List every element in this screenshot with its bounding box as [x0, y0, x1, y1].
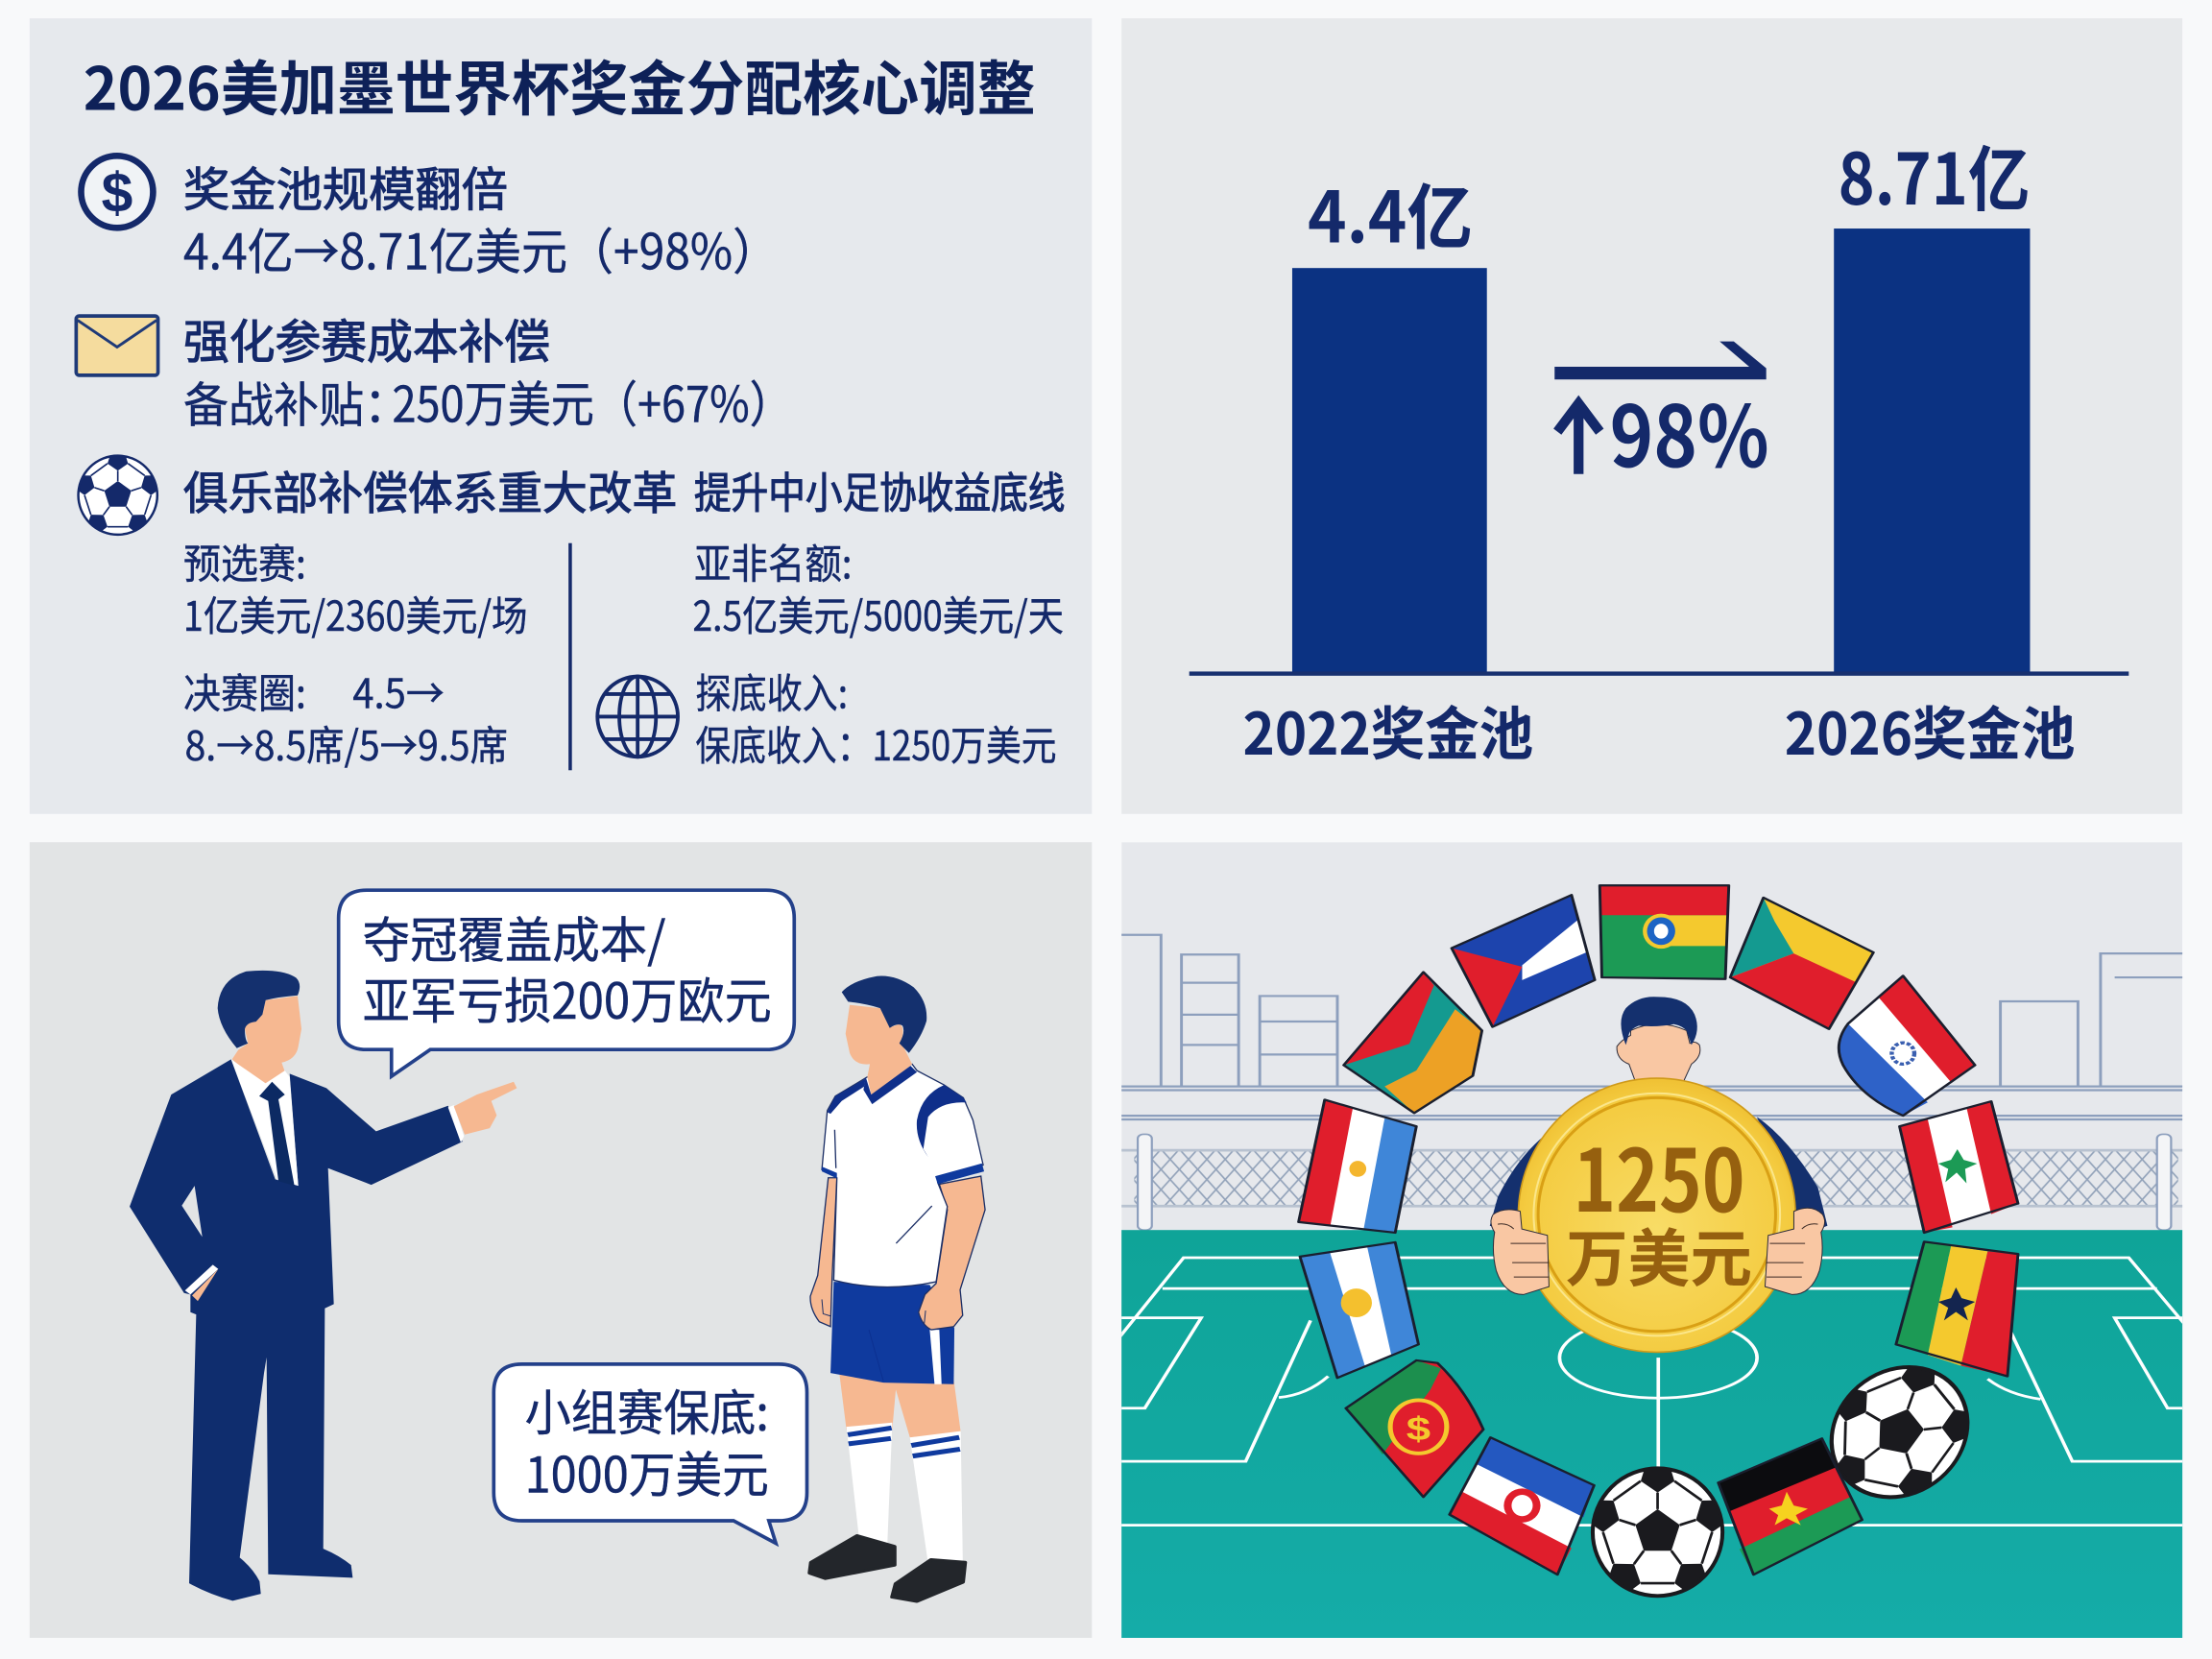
text: floor income label: 探底收入:	[695, 662, 848, 721]
arrow: growth direction	[1554, 342, 1767, 379]
figure: player in kit	[809, 976, 985, 1601]
icon: right hand	[1765, 1208, 1825, 1294]
heading: club compensation reform: 俱乐部补偿体系重大改革	[183, 456, 677, 522]
pitch	[1120, 1230, 2184, 1640]
icon: soccer ball right	[1830, 1365, 1970, 1500]
bar: 2026 prize pool	[1834, 228, 2030, 674]
flag: lower left blue white red	[1450, 1437, 1594, 1575]
panel: core adjustments	[30, 18, 1092, 814]
heading: raise small federations floor: 提升中小足协收益底线	[694, 459, 1065, 520]
icon: dollar coin: $	[102, 161, 132, 224]
flag: lower left green red emblem	[1346, 1360, 1483, 1497]
title: 2026美加墨世界杯奖金分配核心调整	[84, 41, 1036, 128]
icon: globe	[597, 677, 678, 757]
axis label: 2026: 2026奖金池	[1785, 688, 2075, 772]
text: preparation subsidy value: 250万美元（+67%）	[392, 364, 793, 436]
value label: 4.4亿: 4.4亿	[1308, 162, 1473, 264]
flag: right green yellow red	[1896, 1241, 2018, 1377]
text: prize pool values: 4.4亿→8.71亿美元（+98%）	[183, 212, 779, 284]
background: stadium buildings	[1120, 935, 2184, 1119]
text: floor income value: 保底收入：1250万美元	[695, 714, 1057, 773]
flag: left blue white sun	[1300, 1242, 1418, 1378]
text: callout line one: 夺冠覆盖成本/	[363, 901, 666, 973]
flag: left red white blue	[1299, 1099, 1416, 1233]
background: net fence	[1120, 1134, 2184, 1230]
flag: right red white green star	[1900, 1101, 2018, 1233]
icon: soccer ball	[71, 453, 166, 544]
figure: person holding coin	[1490, 997, 1827, 1236]
axis label: 2022: 2022奖金池	[1243, 688, 1533, 772]
icon: dollar coin	[81, 156, 153, 228]
callout: group stage floor	[493, 1364, 806, 1544]
icon: left hand	[1491, 1210, 1549, 1294]
text: finals seats: 8.→8.5席/5→9.5席	[184, 714, 508, 773]
icon: soccer ball bottom	[1590, 1466, 1724, 1598]
text: group stage label: 小组赛保底:	[525, 1373, 769, 1445]
panel: official and player dialogue	[30, 842, 1092, 1638]
text: qualifiers label: 预选赛:	[183, 532, 306, 590]
flag: right red white blue	[1839, 975, 1975, 1116]
heading: participation cost: 强化参赛成本补偿	[183, 304, 550, 372]
icon: envelope	[76, 316, 158, 375]
label: 98% growth: 98%	[1610, 370, 1769, 492]
chart baseline	[1190, 671, 2128, 676]
text: Asia Africa quota values: 2.5亿美元/5000美元/天	[692, 585, 1064, 643]
text: 1250 on coin: 1250	[1573, 1112, 1745, 1237]
text: qualifiers values: 1亿美元/2360美元/场	[183, 585, 528, 643]
heading: prize pool doubled: 奖金池规模翻倍	[183, 153, 508, 220]
text: callout line two: 亚军亏损200万欧元	[363, 961, 772, 1033]
bar: 2022 prize pool	[1292, 268, 1487, 674]
icon: gold coin	[1518, 1078, 1795, 1352]
text: unit on coin: 万美元	[1566, 1209, 1752, 1299]
flag: upper right teal yellow red	[1730, 898, 1873, 1029]
text: Asia Africa quota label: 亚非名额:	[694, 532, 853, 590]
figure: official in suit	[130, 971, 517, 1600]
callout: champion covers costs	[339, 890, 794, 1076]
arrow: up	[1557, 403, 1599, 474]
text: finals label: 决赛圈:	[183, 662, 306, 721]
text: group stage value: 1000万美元	[525, 1435, 769, 1507]
panel: bar chart of prize pool	[1121, 18, 2182, 814]
flag: upper left blue white red	[1452, 895, 1595, 1027]
text: preparation subsidy label: 备战补贴：	[183, 367, 409, 436]
panel: guaranteed income stadium scene	[1120, 842, 2184, 1640]
flag: upper left red teal orange	[1344, 973, 1482, 1113]
flag: lower left green red emblem: $	[1407, 1410, 1431, 1448]
flag: top centre	[1599, 885, 1729, 979]
text: finals arrow value: 4.5→	[352, 662, 445, 721]
flag: lower right black red green	[1719, 1438, 1863, 1575]
value label: 8.71亿: 8.71亿	[1839, 124, 2030, 226]
